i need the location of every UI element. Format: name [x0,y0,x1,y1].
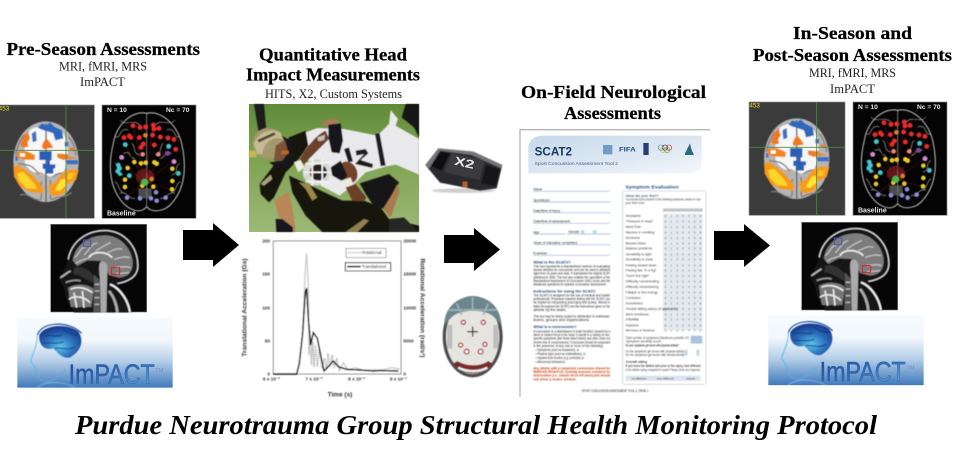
symptom evaluation: Overall rating [626,360,647,364]
heading: pre-season assessments: MRI, fMRI, MRS [59,58,147,74]
logo: post-season ImPACT: ImPACT [820,356,906,387]
heading: quantitative head impact measurements: Impact Measurements [246,64,420,84]
title: protocol name: Purdue Neurotrauma Group Structural Health Monitoring Protocol [74,410,878,440]
symptom evaluation: 0 1 2 3 4 5 6 [665,323,702,327]
y axis tick labels: 150 [262,272,270,277]
heading: in-season and post-season assessments: Post-Season Assessments [753,45,952,65]
symptom evaluation: Do the symptoms get worse with physical activity? [626,349,686,353]
heading: quantitative head impact measurements: HITS, X2, Custom Systems [265,86,402,101]
symptom evaluation: Nausea or vomiting [626,230,654,234]
heading: pre-season assessments: ImPACT [80,74,125,89]
symptom evaluation: "Don't feel right" [626,274,650,278]
symptom evaluation: 0 1 2 3 4 5 6 [665,219,702,223]
form fields: not drive a motor vehicle. [533,377,577,381]
symptom evaluation: Headache [626,214,641,218]
symptom evaluation: 0 1 2 3 4 5 6 [665,258,702,262]
symptom evaluation: More emotional [626,312,649,316]
panel: post-season fMRI scan: 453 [749,103,760,110]
form fields: • Physical signs (such as unsteadiness), or [536,352,586,356]
form fields: Sport/team [533,198,550,202]
photo: football tackle [249,104,419,232]
symptom evaluation: 0 1 2 3 4 5 6 [665,247,702,251]
y axis tick labels [262,239,270,377]
y axis tick labels: 200 [262,239,270,244]
secondary axis tick labels: 5000 [403,339,414,344]
symptom evaluation: You should score yourself on the following symptoms, based on how [626,198,701,202]
symptom evaluation: Symptom Evaluation [625,185,679,191]
y axis tick labels: 0 [267,372,270,377]
panel: pre-season brain network: N = 10 [107,107,127,114]
form fields: This tool may be freely copied for distribution to individuals, [533,314,610,318]
symptom evaluation: Nervous or Anxious [626,329,655,333]
logo: pre-season ImPACT: TM [155,368,164,374]
form fields: involve loss of consciousness. Concussion should be suspected [533,340,610,344]
panel: pre-season brain network [102,105,196,218]
form header: FIFA [619,147,636,154]
secondary axis tick labels: 20000 [403,239,417,244]
symptom evaluation: 0 1 2 3 4 5 6 [665,236,702,240]
symptom evaluation: you feel now. [626,201,645,205]
form fields: What is a concussion? [533,324,577,329]
symptom evaluation: Difficulty remembering [626,285,659,289]
symptom evaluation: Confusion [626,296,641,300]
symptom evaluation: no different [632,377,647,381]
form fields: What is the SCAT2? [533,259,571,264]
panel: pre-season brain network: Baseline [107,211,136,218]
x axis tick labels: 6 x 10⁻³ [263,377,280,382]
form fields [533,188,648,393]
form fields: be helpful for interpreting post-injury test scores. Words in [533,301,610,305]
y axis tick labels: 100 [262,305,270,310]
symptom evaluation: unsure [686,377,695,381]
form fields: direct or indirect force to the head. It results in a variety of non- [533,333,610,337]
form fields: Standardized Assessment of Concussion (SAC) score and the [533,279,610,283]
legend: translational [345,263,391,271]
logo: post-season ImPACT [768,315,924,387]
symptom evaluation: 0 1 2 3 4 5 6 [665,290,702,294]
rotational series [273,253,400,374]
symptom evaluation: 0 1 2 3 4 5 6 [665,214,702,218]
symptom evaluation: Trouble falling asleep (if applicable) [626,307,678,311]
symptom evaluation: 0 1 2 3 4 5 6 [665,329,702,333]
form fields: italics throughout the SCAT2 are the instructions given to the [533,304,610,308]
symptom evaluation: Total number of symptoms (Maximum possible 22) [626,336,689,340]
symptom evaluation: Feeling slowed down [626,263,657,267]
symptom evaluation: 0 1 2 3 4 5 6 [665,285,702,289]
panel: post-season fMRI scan [749,102,845,215]
symptom evaluation: 0 1 2 3 4 5 6 [665,225,702,229]
form fields: Age [533,230,539,234]
panel: post-season brain network: N = 10 [858,104,878,111]
symptom evaluation: is the athlete acting compared to usual? Please circle one response. [626,368,701,372]
legend: translational: Translational [362,264,386,269]
symptom evaluation: Drowsiness [626,301,643,305]
symptom evaluation: Balance problems [626,247,653,251]
symptom evaluation: Difficulty concentrating [626,280,659,284]
form fields: This tool represents a standardized method of evaluating [533,264,610,268]
symptom evaluation: Fatigue or low energy [626,290,658,294]
x axis tick labels [263,377,407,382]
form fields: REMOVED FROM PLAY, medically assessed, monitored for [533,370,611,374]
heading: quantitative head impact measurements [246,44,420,101]
form fields: A concussion is a disturbance in brain function caused by a [533,329,610,333]
secondary axis tick labels [403,239,417,377]
symptom evaluation [623,185,706,384]
symptom evaluation: very different [657,377,674,381]
translational series [273,288,398,374]
form fields: aged from 10 years and older. It supersedes the original SCAT [533,272,610,276]
form fields: • Impaired brain function (e.g. confusion) or [536,356,585,360]
y axis tick labels: 50 [265,339,270,344]
arrow: impact measurement to on-field assessment [444,228,500,271]
x axis tick labels: 8 x 10⁻³ [348,377,366,382]
form fields: Maddocks questions for sideline concussion assessment. [533,283,607,287]
symptom evaluation: 0 1 2 3 4 5 6 [665,296,702,300]
heading: pre-season assessments: Pre-Season Assessments [6,39,200,59]
icon: X2 sensor device: X2 [453,154,476,172]
form fields: Date/time of assessment [533,220,570,224]
symptom evaluation: 0 1 2 3 4 5 6 [665,269,702,273]
form fields: SPORT CONCUSSION ASSESSMENT TOOL 2 | PAGE 1 [582,389,648,393]
form fields: Date/time of injury [533,209,560,213]
form fields: The SCAT2 is designed for the use of medical and health [533,293,610,297]
photo: instrumented helmet interior [443,296,503,377]
form fields: published in 2005. This tool also enables the calculation of the [533,275,610,279]
x axis tick labels: 7 x 10⁻³ [306,377,323,382]
symptom evaluation: Sensitivity to noise [626,258,653,262]
legend: rotational: Rotational [362,250,382,255]
form header [528,136,702,173]
symptom evaluation: 0 1 2 3 4 5 6 [665,301,702,305]
heading: pre-season assessments [6,39,200,89]
symptom evaluation: How do you feel? [626,193,659,198]
y axis title: Translational Acceleration (Gs) [243,258,249,357]
x axis tick labels: 9 x 10⁻³ [390,377,407,382]
symptom evaluation: Sensitivity to light [626,252,651,256]
symptom evaluation: 0 1 2 3 4 5 6 [665,280,702,284]
symptom evaluation: Feeling like "in a fog" [626,269,658,273]
form fields: • Symptoms (such as headache), or [536,348,580,352]
legend: rotational [346,248,386,258]
panel: post-season brain network: Nc = 70 [917,104,941,111]
heading: in-season and post-season assessments: MRI, fMRI, MRS [809,65,896,80]
form fields: Instructions for using the SCAT2 [533,288,596,293]
logo: pre-season ImPACT [17,318,173,389]
symptom evaluation: 0 1 2 3 4 5 6 [665,318,702,322]
form fields: Years of education completed [533,241,577,245]
x axis title: Time (s) [328,391,352,398]
panel: post-season brain network: Baseline [858,208,887,215]
symptom evaluation: 0 1 2 3 4 5 6 [665,312,702,316]
heading: on-field neurological assessments: On-Field Neurological [521,82,706,102]
symptom evaluation: Do the symptoms get worse with mental activity? [626,353,686,357]
panel: SCAT2 assessment form [520,130,710,398]
panel: pre-season fMRI scan [0,105,94,218]
symptom evaluation: Symptom severity score [626,339,661,343]
heading: in-season and post-season assessments [753,23,952,96]
symptom evaluation: Sadness [626,323,639,327]
heading: on-field neurological assessments: Assessments [564,103,661,123]
secondary axis tick labels: 10000 [403,305,417,310]
heading: in-season and post-season assessments: ImPACT [830,81,875,96]
symptom evaluation: 0 1 2 3 4 5 6 [665,307,702,311]
logo: pre-season ImPACT: ImPACT [69,358,155,389]
heading: quantitative head impact measurements: Quantitative Head [259,44,407,64]
panel: post-season sagittal MRI [802,222,898,310]
symptom evaluation: Blurred vision [626,241,646,245]
panel: post-season brain network [853,102,947,215]
form fields: deterioration (i.e., should not be left alone) and should [533,374,610,378]
icon: X2 sensor device [425,148,502,193]
form fields: Any athlete with a suspected concussion should be [533,366,610,370]
symptom evaluation: Dizziness [626,236,640,240]
form fields: teams, groups and organizations. [533,318,590,322]
symptom evaluation: Neck Pain [626,225,641,229]
symptom evaluation: 0 1 2 3 4 5 6 [665,263,702,267]
symptom evaluation: Irritability [626,318,639,322]
form fields: Gender [568,230,580,234]
symptom evaluation: 0 1 2 3 4 5 6 [665,274,702,278]
form fields: athlete by the tester. [533,308,567,312]
secondary axis title: Rotational Acceleration (rad/s²) [419,258,426,358]
arrow: on-field assessment to post-season assessment [714,224,770,267]
symptom evaluation: 0 1 2 3 4 5 6 [665,241,702,245]
panel: pre-season brain network: Nc = 70 [166,107,190,114]
symptom evaluation: If you know the athlete well prior to the injury, how different [626,364,701,368]
panel: pre-season sagittal MRI [51,224,147,312]
form header: SCAT2 [535,144,572,158]
heading: in-season and post-season assessments: In-Season and [793,23,912,43]
form fields: professionals. Preseason baseline testing with the SCAT2 can [533,297,610,301]
symptom evaluation: Do your symptoms get worse with physical activity? [626,343,679,347]
symptom evaluation: 0 1 2 3 4 5 6 [665,252,702,256]
form fields: Examiner [533,252,548,256]
secondary axis tick labels: 15000 [403,272,417,277]
logo: post-season ImPACT: TM [906,365,915,371]
chart: translational and rotational acceleration [243,239,426,398]
arrow: pre-season to impact measurement [183,223,239,267]
heading: on-field neurological assessments [521,82,706,123]
form fields: in the presence of any one or more of the following: [533,344,603,348]
secondary axis tick labels: 0 [403,372,406,377]
symptom evaluation: 0 1 2 3 4 5 6 [665,230,702,234]
form fields: injured athletes for concussion and can be used in athletes [533,268,610,272]
form fields: Name [533,188,542,192]
form header: Sport Concussion Assessment Tool 2 [535,161,618,166]
form fields: specific symptoms (like those listed below) and often does not [533,337,610,341]
form fields: • Abnormal behaviour. [536,360,566,364]
symptom evaluation: "Pressure in head" [626,219,654,223]
